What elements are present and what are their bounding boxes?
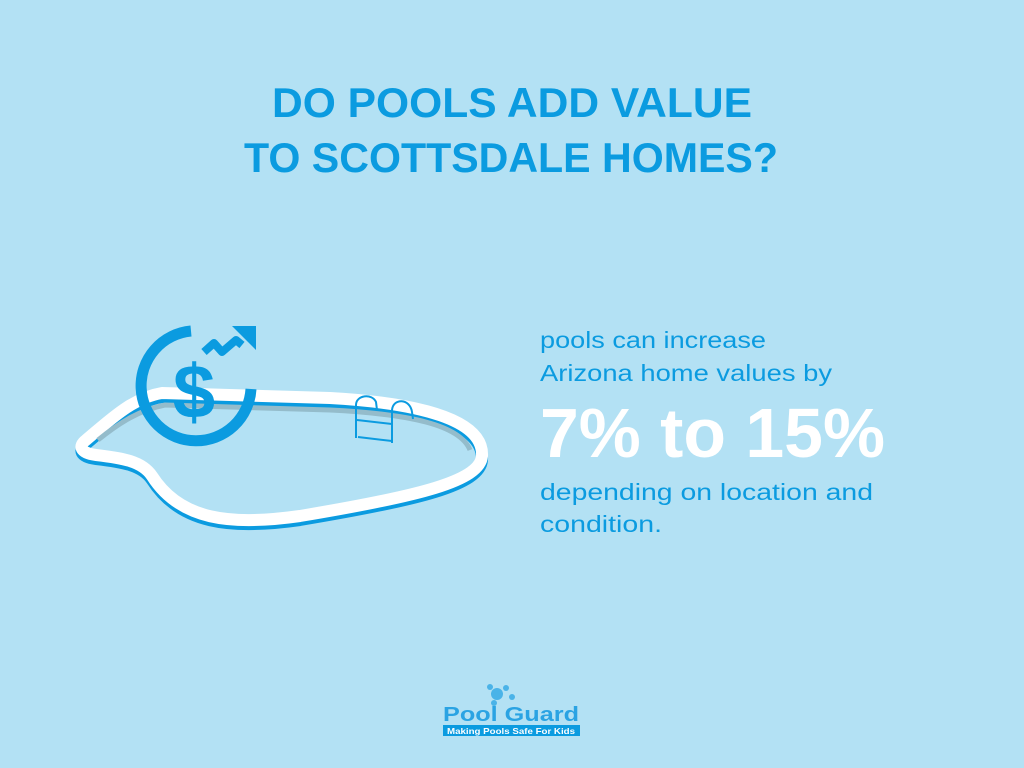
pool outline bbox=[81, 393, 482, 524]
title: DO POOLS ADD VALUE bbox=[272, 79, 752, 126]
text block: statistic: 7% to 15% bbox=[540, 394, 885, 472]
logo: Pool Guard: Making Pools Safe For Kids bbox=[447, 726, 575, 736]
icon: dollar growth bbox=[141, 326, 256, 441]
text block: statistic: Arizona home values by bbox=[540, 360, 833, 386]
title: TO SCOTTSDALE HOMES? bbox=[244, 134, 778, 181]
logo: Pool Guard bbox=[443, 684, 580, 736]
logo: Pool Guard: Pool Guard bbox=[443, 704, 579, 726]
text block: statistic bbox=[540, 327, 885, 537]
title bbox=[244, 79, 778, 181]
text block: statistic: depending on location and bbox=[540, 479, 873, 505]
icon: dollar growth: $ bbox=[173, 350, 215, 435]
icon: ladder bbox=[356, 396, 413, 443]
text block: statistic: condition. bbox=[540, 511, 662, 537]
text block: statistic: pools can increase bbox=[540, 327, 766, 353]
illustration: pool with value icon bbox=[81, 326, 482, 524]
